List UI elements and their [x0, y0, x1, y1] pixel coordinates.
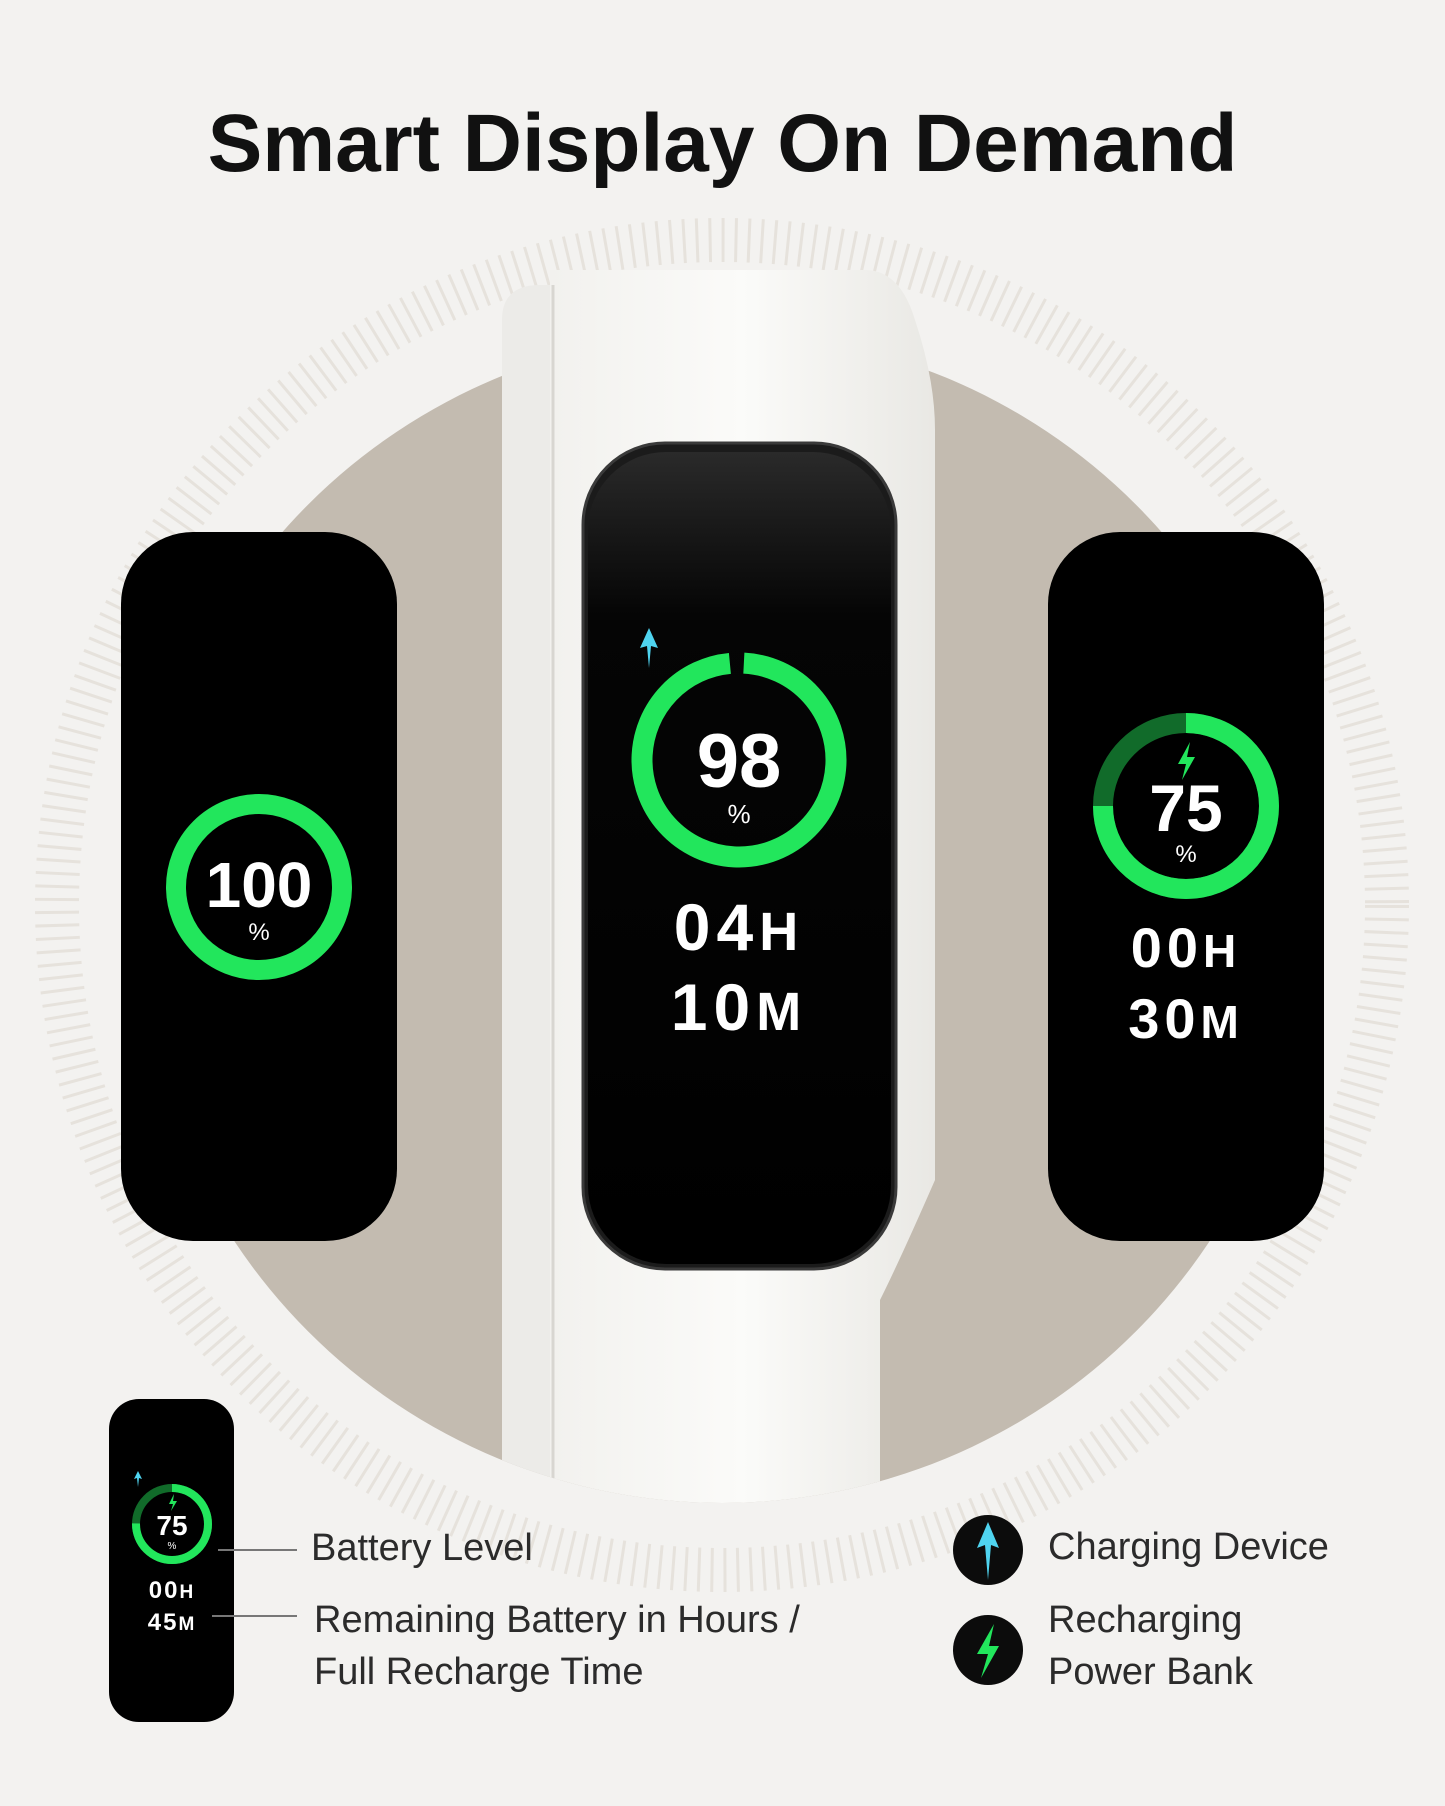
left panel	[121, 532, 397, 1241]
device body	[502, 270, 935, 1600]
text: battery level: Battery Level	[311, 1527, 533, 1569]
text: recharging power bank: Recharging	[1048, 1599, 1242, 1641]
left panel: %	[248, 919, 270, 946]
legend small panel: 45M	[148, 1609, 196, 1636]
center screen: %	[727, 799, 751, 829]
icon: charging device	[953, 1515, 1023, 1585]
text: remaining battery	[314, 1599, 800, 1693]
legend small panel	[109, 1399, 234, 1722]
leader lines	[212, 1550, 297, 1616]
center screen: 98	[697, 719, 781, 804]
legend small panel: 00H	[149, 1577, 195, 1604]
legend small panel: %	[168, 1541, 177, 1552]
right panel: 00H	[1131, 916, 1241, 979]
text: remaining battery: Remaining Battery in Hours /	[314, 1599, 800, 1641]
right panel: 30M	[1128, 987, 1244, 1050]
text: recharging power bank: Power Bank	[1048, 1651, 1253, 1693]
legend small panel: 75	[156, 1510, 188, 1541]
center screen: 10M	[671, 970, 807, 1044]
tick ring	[57, 240, 1387, 1570]
beige circle	[137, 333, 1307, 1503]
center screen	[583, 443, 896, 1269]
icon: charging arrow	[640, 628, 658, 668]
main illustration	[35, 218, 1409, 1722]
right panel: 75	[1149, 771, 1223, 845]
right panel	[1048, 532, 1324, 1241]
text: remaining battery: Full Recharge Time	[314, 1651, 643, 1693]
text: recharging power bank	[1048, 1599, 1253, 1693]
right panel: %	[1175, 841, 1197, 868]
text: charging device: Charging Device	[1048, 1526, 1329, 1568]
left panel: 100	[206, 849, 312, 921]
icon: recharging power bank	[953, 1615, 1023, 1685]
title: Smart Display On Demand	[208, 98, 1237, 189]
ring 98	[637, 658, 841, 862]
center screen: 04H	[674, 890, 804, 964]
